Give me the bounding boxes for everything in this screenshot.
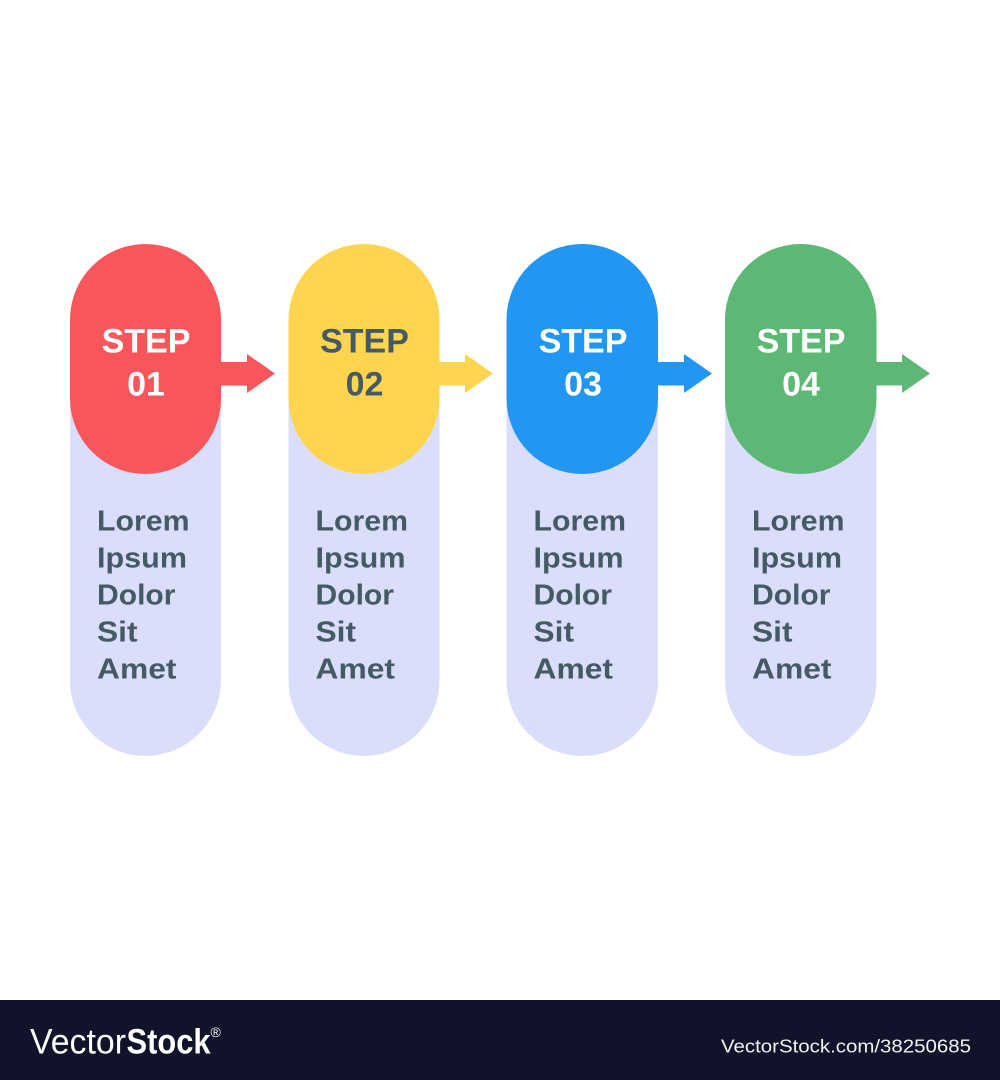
arrow: step 1 xyxy=(221,354,275,393)
text block: step 4: Sit xyxy=(752,616,793,648)
text block: step 4: Amet xyxy=(752,654,832,686)
heading: step 1: 01 xyxy=(127,366,165,404)
heading: step 3: STEP xyxy=(539,322,627,360)
heading: step 4: 04 xyxy=(782,366,820,404)
panel: step 4 xyxy=(725,244,930,756)
panel: step 1 xyxy=(70,244,275,756)
heading: step 4: STEP xyxy=(757,322,845,360)
header pill: step 3 xyxy=(506,244,658,474)
panel: step 3 xyxy=(506,244,712,756)
footer logo: Stock xyxy=(126,1022,211,1062)
text block: step 1: Sit xyxy=(97,616,138,648)
heading: step 2: 02 xyxy=(346,366,383,404)
text block: step 1 xyxy=(97,506,190,686)
footer logo: Vector xyxy=(30,1022,126,1062)
body pill: step 3 xyxy=(506,330,658,756)
text block: step 1: Dolor xyxy=(97,580,176,612)
footer bar xyxy=(0,1000,1000,1080)
body pill: step 4 xyxy=(725,330,876,756)
text block: step 3: Lorem xyxy=(534,506,626,538)
text block: step 2: Ipsum xyxy=(316,542,406,574)
arrow: step 2 xyxy=(439,354,493,393)
text block: step 1: Ipsum xyxy=(97,542,187,574)
header pill: step 4 xyxy=(725,244,876,474)
heading: step 4 xyxy=(757,322,845,404)
text block: step 4: Lorem xyxy=(752,506,844,538)
body pill: step 1 xyxy=(70,330,221,756)
text block: step 3 xyxy=(534,506,626,686)
body pill: step 2 xyxy=(288,330,440,756)
heading: step 3: 03 xyxy=(564,366,602,404)
text block: step 2: Sit xyxy=(316,616,356,648)
header pill: step 2 xyxy=(288,244,440,474)
text block: step 3: Amet xyxy=(534,654,613,686)
text block: step 4: Dolor xyxy=(752,580,830,612)
panel: step 2 xyxy=(288,244,493,756)
text block: step 3: Dolor xyxy=(534,580,612,612)
heading: step 3 xyxy=(539,322,627,404)
text block: step 4 xyxy=(752,506,844,686)
text block: step 1: Amet xyxy=(97,654,177,686)
arrow: step 4 xyxy=(876,354,930,393)
header pill: step 1 xyxy=(70,244,221,474)
text block: step 1: Lorem xyxy=(97,506,190,538)
heading: step 2: STEP xyxy=(320,322,409,360)
heading: step 2 xyxy=(320,322,409,404)
heading: step 1: STEP xyxy=(102,322,190,360)
registered mark: ® xyxy=(210,1024,222,1040)
text block: step 2: Amet xyxy=(316,654,395,686)
arrow: step 3 xyxy=(658,354,712,393)
text block: step 2: Lorem xyxy=(316,506,408,538)
text block: step 3: Ipsum xyxy=(534,542,624,574)
footer logo xyxy=(30,1022,211,1062)
heading: step 1 xyxy=(102,322,190,404)
text block: step 4: Ipsum xyxy=(752,542,842,574)
text block: step 2: Dolor xyxy=(316,580,394,612)
text block: step 2 xyxy=(316,506,408,686)
text block: step 3: Sit xyxy=(534,616,574,648)
footer url: VectorStock.com/38250685 xyxy=(721,1036,971,1056)
